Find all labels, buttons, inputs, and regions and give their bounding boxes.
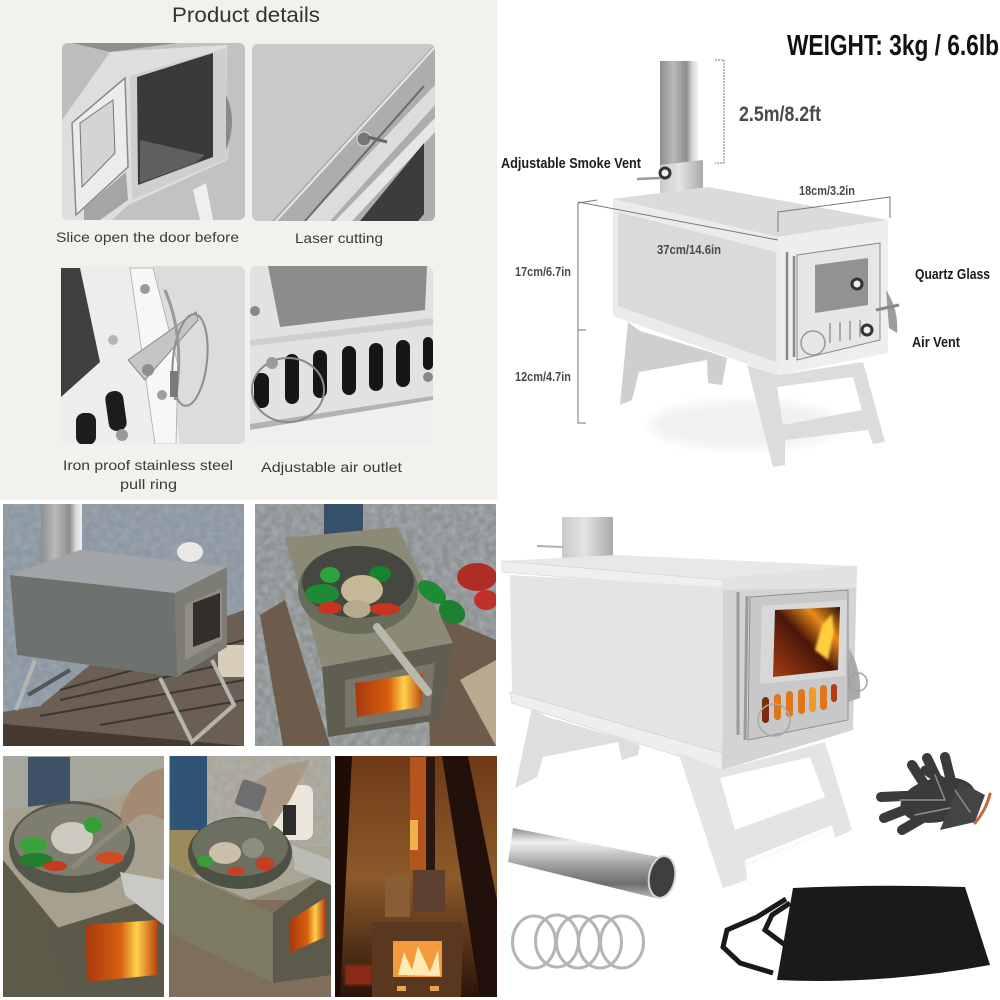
- quartz glass: [815, 258, 868, 313]
- caption: pull ring: [63, 457, 233, 492]
- accessory: carry bag: [723, 886, 990, 981]
- hero vent handle: [537, 546, 563, 547]
- label: body height: 17cm/6.7in: [515, 264, 571, 279]
- caption: pull ring: pull ring: [120, 476, 177, 492]
- hero chimney collar: [562, 517, 613, 562]
- label: chimney height: 2.5m/8.2ft: [739, 103, 821, 126]
- caption: pull ring: Iron proof stainless steel: [63, 457, 233, 473]
- fire window: [290, 898, 325, 953]
- chimney collar: [660, 160, 703, 198]
- dimension drawing of stove: [501, 60, 990, 467]
- hero handle: [848, 648, 860, 702]
- caption: air outlet: Adjustable air outlet: [261, 459, 402, 475]
- caption: door: Slice open the door before: [56, 229, 239, 245]
- photo: seasoning the pan: [169, 756, 331, 997]
- accessory: gloves: [881, 757, 990, 830]
- photo: stove in tent at night: [335, 756, 497, 997]
- door handle: [886, 290, 897, 333]
- dimension lines: [578, 60, 890, 423]
- hero top: [502, 555, 857, 580]
- smoke vent knob: [637, 168, 670, 179]
- stove side: [613, 199, 778, 375]
- side rails: [787, 252, 794, 360]
- detail photo: pull ring: [60, 266, 245, 445]
- hero front leg: [678, 742, 852, 888]
- hero pull ring: [758, 704, 790, 736]
- chimney pipe: [660, 61, 698, 171]
- heading: product details: Product details: [172, 4, 320, 27]
- photo: pan on stove: [255, 504, 498, 746]
- label: leg height: 12cm/4.7in: [515, 369, 571, 384]
- door vents: [830, 320, 860, 343]
- hero fire window: [773, 607, 840, 677]
- hero hinge rails: [738, 592, 747, 740]
- label: air vent: Air Vent: [912, 334, 960, 351]
- photo: stove on table: [3, 504, 244, 746]
- accessory: metal rings: [512, 915, 644, 968]
- label: length: 37cm/14.6in: [657, 242, 721, 257]
- hero side: [510, 575, 723, 754]
- hero stove with fire: [502, 517, 867, 888]
- label: smoke vent: Adjustable Smoke Vent: [501, 155, 641, 172]
- rear leg: [620, 322, 727, 405]
- glass knob: [852, 279, 862, 289]
- hero air slots with fire: [762, 684, 837, 723]
- fire window: [393, 941, 442, 977]
- fire window: [85, 920, 157, 982]
- panel: product details background: [0, 0, 497, 500]
- stove front: [778, 220, 888, 375]
- label: width: 18cm/3.2in: [799, 183, 855, 198]
- door: [797, 243, 880, 360]
- stove top: [612, 187, 888, 237]
- detail photo: air outlet: [250, 266, 433, 444]
- hero door: [748, 590, 848, 740]
- detail photo: laser cutting: [252, 44, 435, 221]
- floor shadow: [650, 401, 840, 449]
- hero front: [722, 566, 857, 770]
- caption: laser: Laser cutting: [295, 230, 383, 246]
- detail photo: open door: [62, 43, 245, 220]
- hero rear leg: [515, 708, 640, 788]
- photo: cooking with tongs: [3, 756, 164, 997]
- stove fire window: [355, 673, 423, 717]
- accessory: stainless pipe: [508, 828, 678, 900]
- pull ring: [801, 331, 825, 355]
- front leg: [747, 362, 885, 467]
- air vent knob: [862, 325, 872, 335]
